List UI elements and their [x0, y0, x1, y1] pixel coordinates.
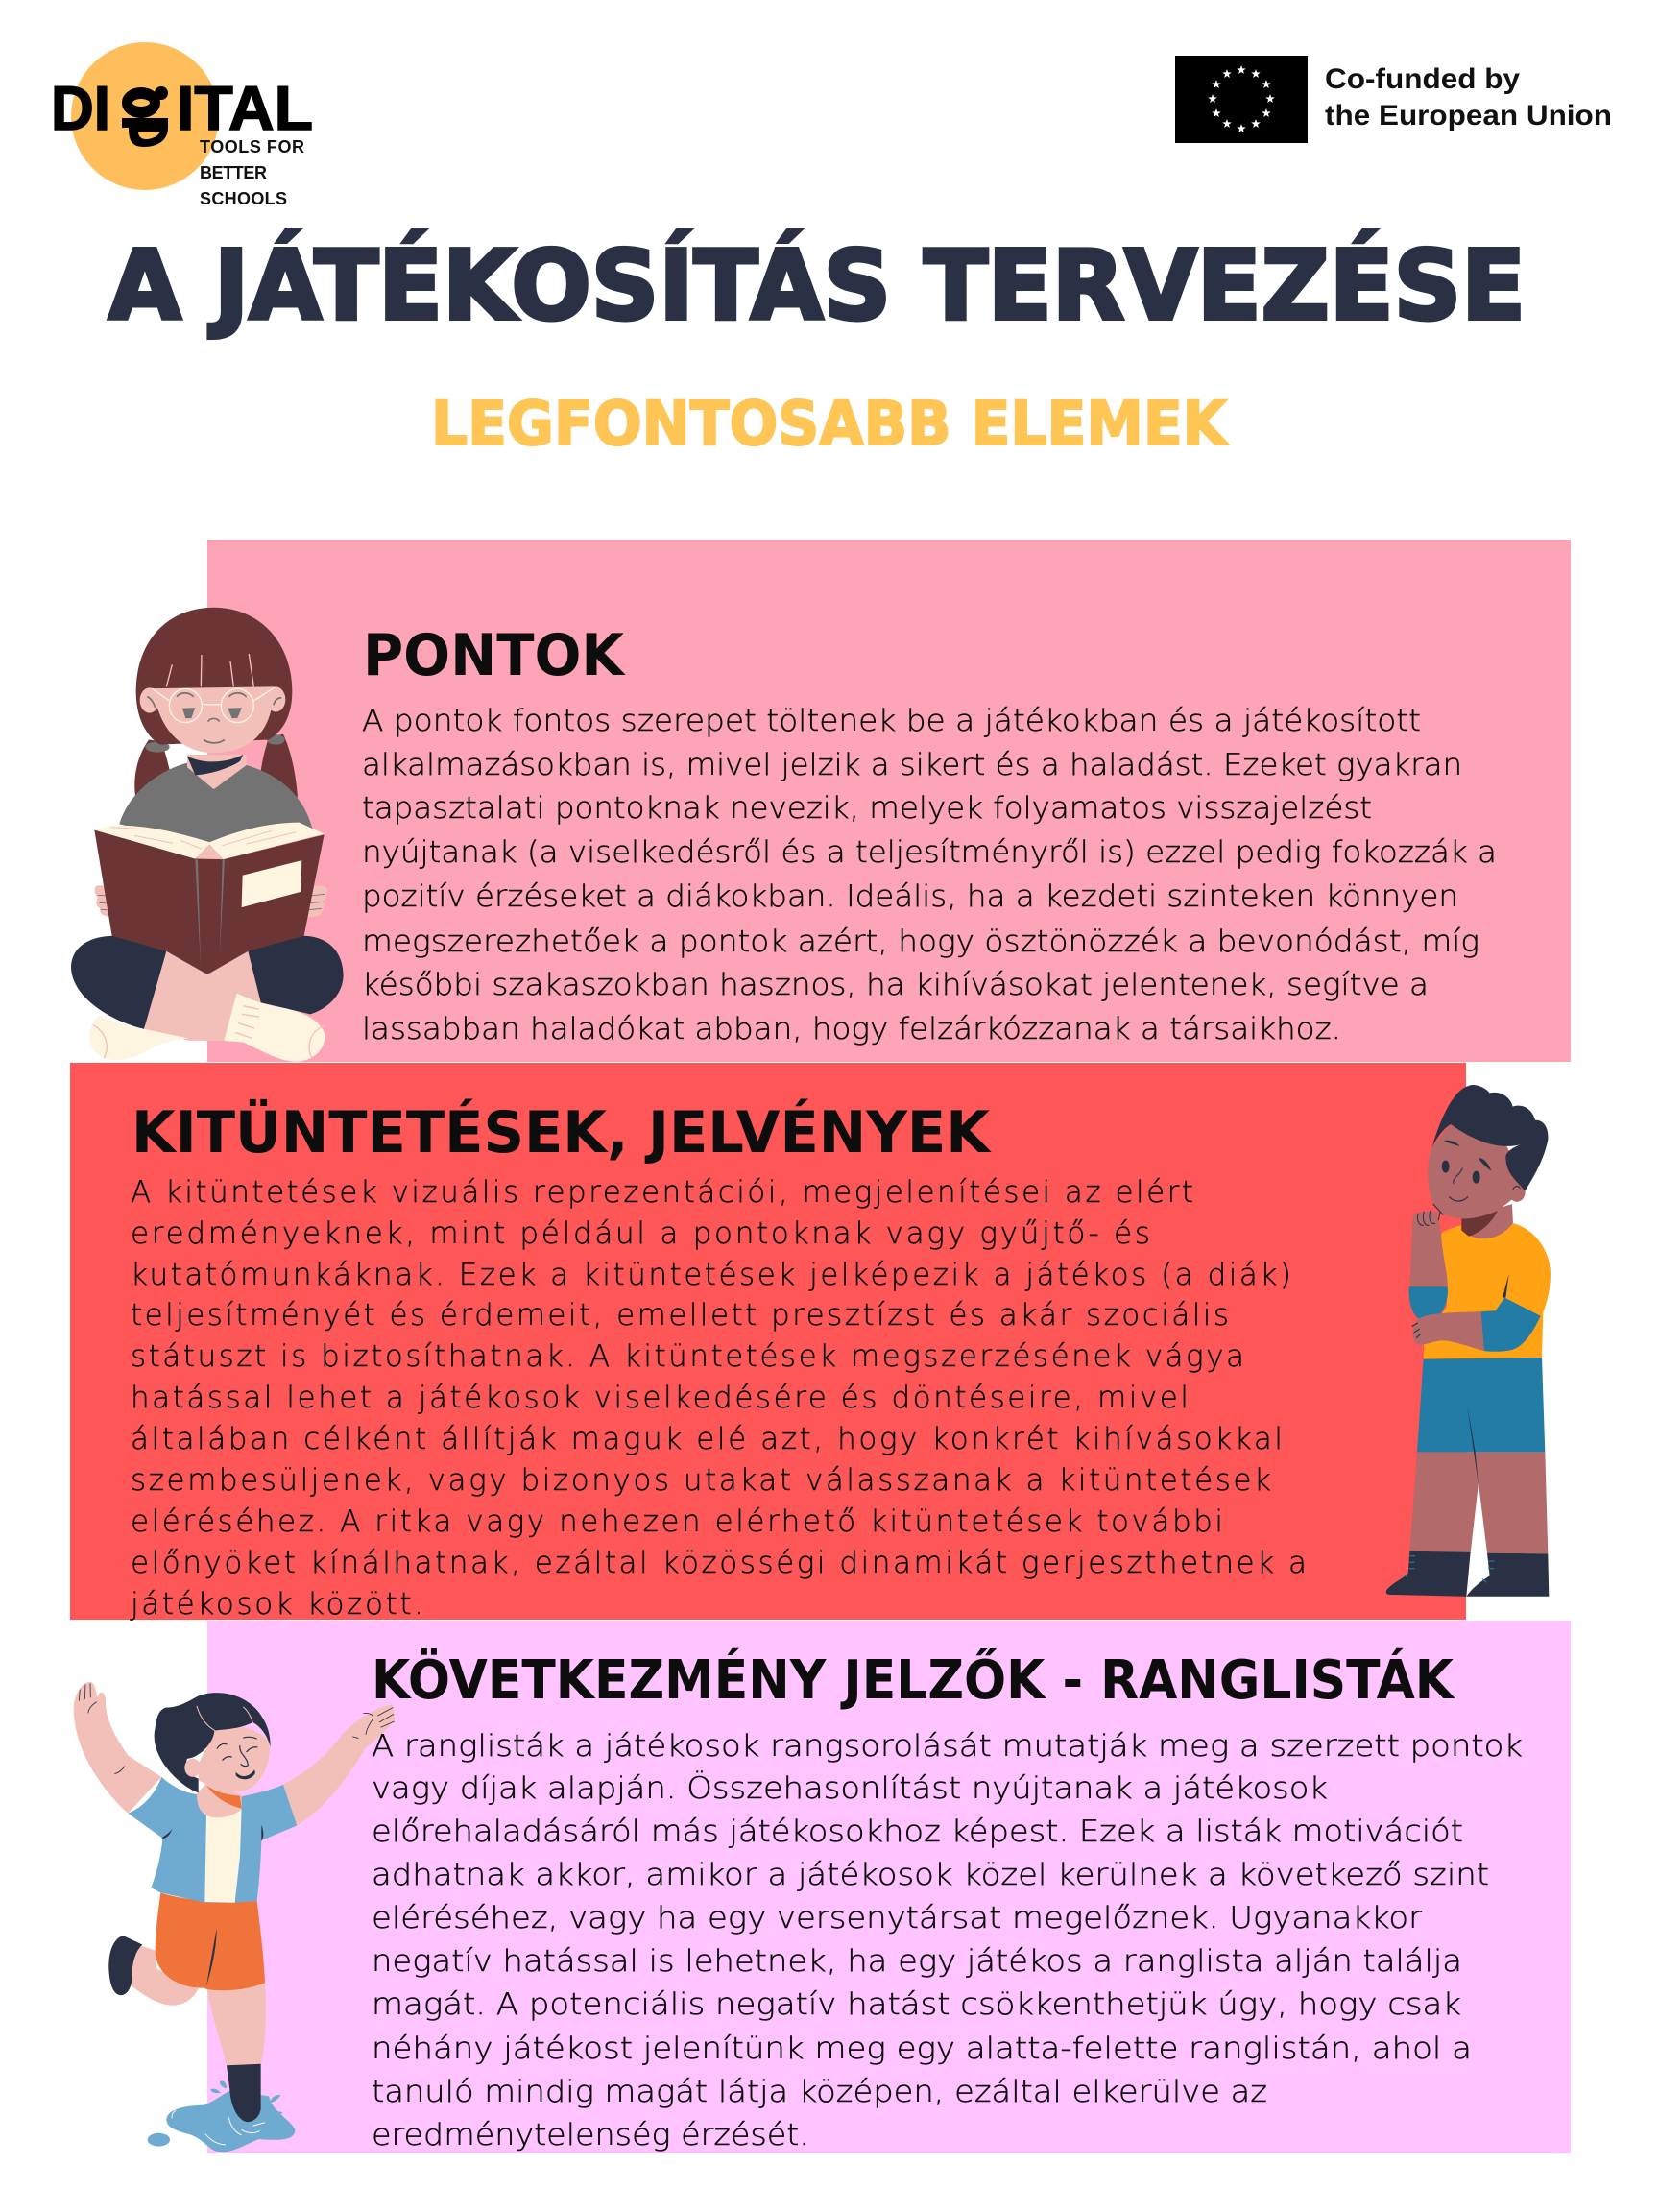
logo: Digital Tools for Better Schools: DI — [51, 73, 110, 143]
body: pontok: tapasztalati pontoknak nevezik, melyek folyamatos visszajelzést — [362, 791, 1372, 826]
body: pontok: későbbi szakaszokban hasznos, ha kihívásokat jelentenek, segítve a — [362, 968, 1429, 1002]
co-funded text: Co-funded by — [1325, 63, 1520, 95]
body: ranglisták: magát. A potenciális negatív hatást csökkenthetjük úgy, hogy csak — [372, 1987, 1461, 2022]
section: pontok text — [362, 622, 1497, 1046]
body: kitüntetések: szembesüljenek, vagy bizonyos utakat válasszanak a kitüntetések — [131, 1463, 1271, 1498]
body: kitüntetések: teljesítményét és érdemeit, emellett presztízst és akár szociális — [131, 1298, 1229, 1333]
body: pontok: alkalmazásokban is, mivel jelzik a sikert és a haladást. Ezeket gyakran — [362, 748, 1462, 782]
section: ranglisták text — [372, 1648, 1523, 2152]
panel: kitüntetések — [70, 1063, 1466, 1620]
body: ranglisták: vagy díjak alapján. Összehasonlítást nyújtanak a játékosok — [372, 1771, 1328, 1806]
logo: EU flag — [1175, 56, 1308, 143]
body: kitüntetések: előnyöket kínálhatnak, ezáltal közösségi dinamikát gerjeszthetnek a — [131, 1546, 1307, 1580]
section: kitüntetések text — [130, 1097, 1307, 1622]
panel: pontok — [207, 540, 1571, 1062]
illustration: girl reading a book — [71, 608, 344, 1062]
body: ranglisták — [372, 1729, 1523, 2152]
body: pontok: megszerezhetőek a pontok azért, hogy ösztönözzék a bevonódást, míg — [362, 925, 1479, 959]
body: ranglisták: A ranglisták a játékosok rangsorolását mutatják meg a szerzett pontok — [372, 1729, 1523, 1764]
panel: ranglisták — [207, 1621, 1571, 2153]
body: kitüntetések: hatással lehet a játékosok viselkedésére és döntéseire, mivel — [131, 1381, 1189, 1415]
logo: Digital Tools for Better Schools — [51, 42, 313, 208]
body: pontok: A pontok fontos szerepet töltenek be a játékokban és a játékosított — [362, 704, 1421, 738]
body: ranglisták: negatív hatással is lehetnek, ha egy játékos a ranglista alján találja — [372, 1944, 1462, 1979]
body: kitüntetések: általában célként állítják maguk elé azt, hogy konkrét kihívásokkal — [131, 1422, 1283, 1456]
heading: ranglisták: KÖVETKEZMÉNY JELZŐK - RANGLISTÁK — [372, 1648, 1455, 1712]
body: pontok: pozitív érzéseket a diákokban. Ideális, ha a kezdeti szinteken könnyen — [362, 879, 1458, 914]
body: kitüntetések: kutatómunkáknak. Ezek a kitüntetések jelképezik a játékos (a diák) — [131, 1258, 1291, 1292]
heading: pontok: PONTOK — [363, 622, 626, 689]
body: kitüntetések: játékosok között. — [130, 1587, 423, 1622]
logo: Digital Tools for Better Schools: SCHOOLS — [200, 189, 287, 208]
subtitle: LEGFONTOSABB ELEMEK — [431, 389, 1229, 459]
body: kitüntetések: eléréséhez. A ritka vagy nehezen elérhető kitüntetések további — [131, 1504, 1223, 1539]
body: kitüntetések: eredményeknek, mint például a pontoknak vagy gyűjtő- és — [131, 1216, 1150, 1251]
body: pontok — [362, 704, 1497, 1046]
body: ranglisták: adhatnak akkor, amikor a játékosok közel kerülnek a következő szint — [372, 1858, 1489, 1892]
body: ranglisták: néhány játékost jelenítünk meg egy alatta-felette ranglistán, ahol a — [372, 2032, 1472, 2066]
logo: Digital Tools for Better Schools: TOOLS FOR — [200, 137, 304, 156]
body: kitüntetések: státuszt is biztosíthatnak. A kitüntetések megszerzésének vágya — [131, 1339, 1244, 1374]
body: pontok: lassabban haladókat abban, hogy felzárkózzanak a társaikhoz. — [362, 1012, 1341, 1046]
title: A JÁTÉKOSÍTÁS TERVEZÉSE — [108, 229, 1526, 342]
co-funded text: the European Union — [1325, 100, 1612, 132]
heading: kitüntetések: KITÜNTETÉSEK, JELVÉNYEK — [132, 1097, 992, 1166]
logo: Digital Tools for Better Schools: g — [122, 96, 145, 138]
illustration: jumping kid in puddle — [74, 1682, 396, 2152]
body: kitüntetések: A kitüntetések vizuális reprezentációi, megjelenítései az elért — [131, 1175, 1193, 1210]
body: ranglisták: előrehaladásáról más játékosokhoz képest. Ezek a listák motivációt — [372, 1815, 1463, 1849]
body: pontok: nyújtanak (a viselkedésről és a teljesítményről is) ezzel pedig fokozzák a — [362, 835, 1497, 870]
body: kitüntetések — [130, 1175, 1307, 1622]
body: ranglisták: eléréséhez, vagy ha egy versenytársat megelőznek. Ugyanakkor — [372, 1901, 1422, 1936]
logo: Digital Tools for Better Schools: BETTER — [200, 163, 267, 182]
co-funded text — [1325, 63, 1612, 132]
body: ranglisták: eredménytelenség érzését. — [372, 2118, 809, 2152]
logo: Digital Tools for Better Schools: ITAL — [177, 73, 313, 143]
body: ranglisták: tanuló mindig magát látja középen, ezáltal elkerülve az — [372, 2075, 1267, 2109]
illustration: thinking boy — [1386, 1085, 1551, 1597]
